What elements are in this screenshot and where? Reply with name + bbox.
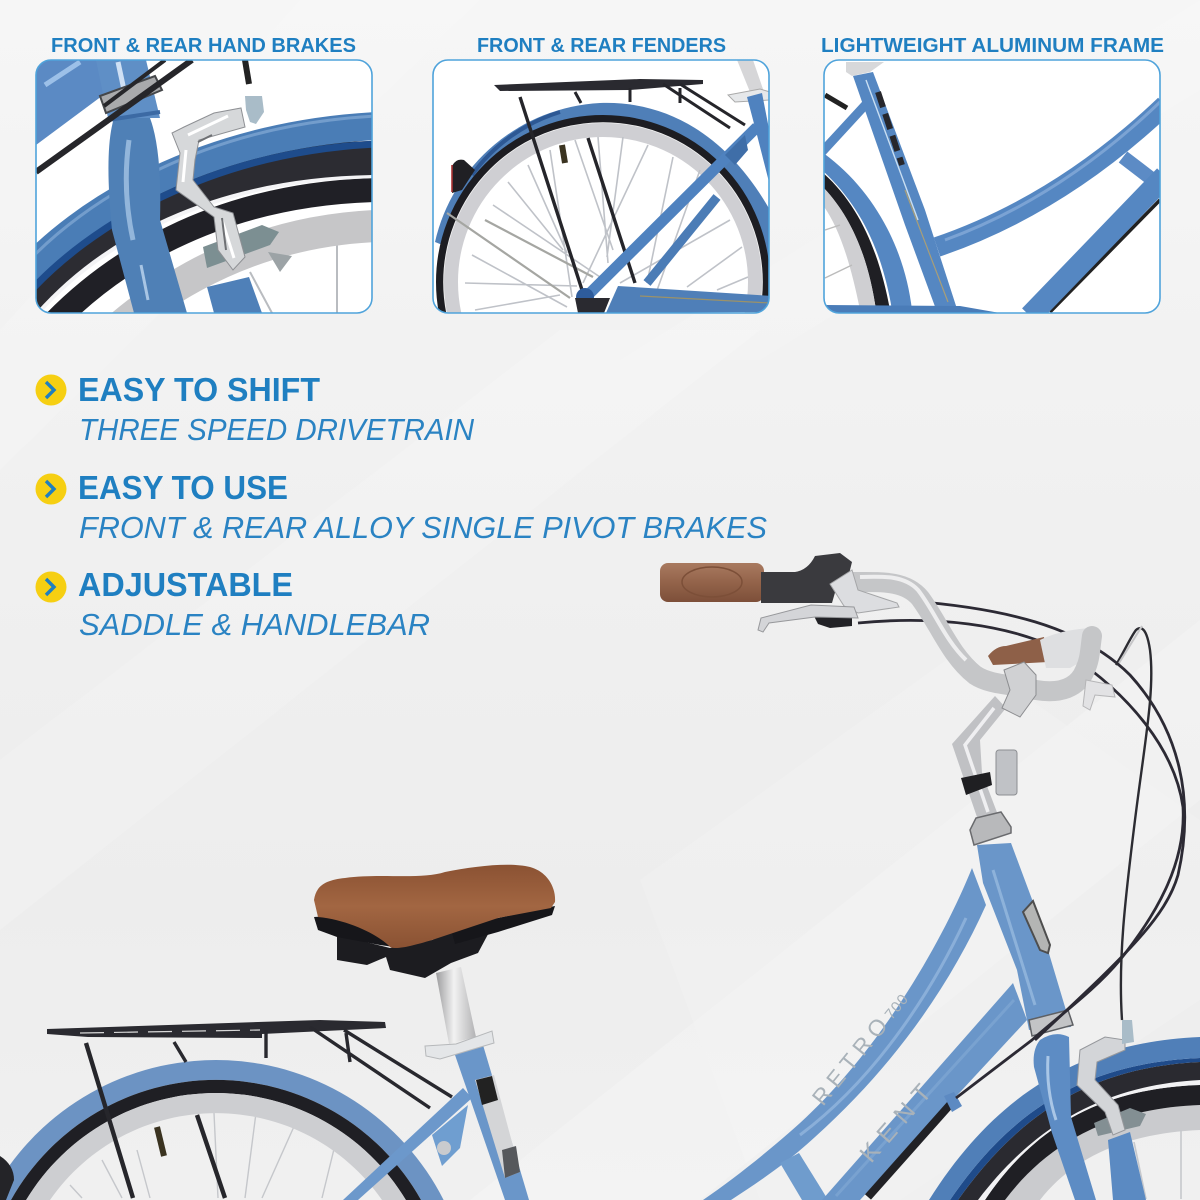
feature: easy to use: EASY TO USE xyxy=(78,469,288,506)
feature: easy to shift xyxy=(36,371,475,447)
valve xyxy=(562,145,565,163)
fender xyxy=(435,102,768,259)
cross connector xyxy=(780,1153,828,1200)
spokes xyxy=(250,240,337,313)
tyre inner xyxy=(985,1085,1200,1200)
tread xyxy=(958,1062,1200,1200)
chain stay bar xyxy=(826,305,1000,313)
spokes xyxy=(1134,1130,1181,1199)
headset ring xyxy=(100,76,162,113)
rear light edge xyxy=(0,1156,14,1200)
panel: hand brake photo xyxy=(35,59,373,314)
white stripe xyxy=(978,1080,1200,1200)
brake pad xyxy=(203,225,279,268)
saddle black shell xyxy=(314,906,555,947)
seat tube xyxy=(455,1045,529,1200)
lever body black xyxy=(814,616,852,628)
fork xyxy=(1034,1034,1096,1200)
fender xyxy=(20,116,376,296)
fork lower blade xyxy=(1108,1132,1146,1200)
caption: front and rear hand brakes: FRONT & REAR HAND BRAKES xyxy=(51,35,356,57)
feature: easy to shift: THREE SPEED DRIVETRAIN xyxy=(79,412,475,447)
curved top tube xyxy=(703,868,986,1200)
valve xyxy=(157,1127,164,1156)
cable clip xyxy=(944,1092,962,1112)
near grip xyxy=(660,563,764,602)
rear wheel xyxy=(0,1043,444,1200)
stem xyxy=(952,696,1006,820)
tyre and rim xyxy=(436,115,768,312)
saddle xyxy=(314,865,555,948)
lower tube xyxy=(822,983,1027,1200)
cable barrel xyxy=(245,96,264,124)
front brake pad xyxy=(1094,1108,1146,1136)
feature: easy to use xyxy=(36,469,767,545)
seat post xyxy=(436,967,476,1044)
feature list xyxy=(36,371,767,642)
frame lettering: RETRO 700: RETRO xyxy=(807,1008,896,1110)
icon: yellow chevron bullet xyxy=(36,572,66,602)
rack struts xyxy=(520,97,635,293)
caption: front and rear fenders: FRONT & REAR FENDERS xyxy=(477,35,726,57)
fork xyxy=(108,112,187,313)
cross connector xyxy=(1123,157,1153,180)
fender xyxy=(929,1037,1200,1200)
frame lettering: RETRO 700: 700 xyxy=(882,991,913,1023)
spokes xyxy=(70,1113,335,1198)
lower tube xyxy=(1030,176,1165,316)
seat stay xyxy=(343,1088,472,1200)
panel: fenders photo xyxy=(432,59,770,314)
head tube xyxy=(977,843,1071,1030)
stem clamp xyxy=(1002,662,1036,717)
feature: adjustable: SADDLE & HANDLEBAR xyxy=(79,607,430,642)
dropout bracket xyxy=(432,1105,468,1166)
fender xyxy=(0,1060,444,1200)
icon: yellow chevron bullet xyxy=(36,374,66,406)
panel: frame photo xyxy=(822,60,1165,316)
handlebar xyxy=(851,577,1092,691)
spokes xyxy=(465,137,748,310)
far bar end xyxy=(1040,628,1099,668)
rim xyxy=(26,1093,406,1200)
front brake caliper xyxy=(1077,1037,1125,1135)
feature: easy to shift: EASY TO SHIFT xyxy=(78,371,320,408)
rear wheel section xyxy=(822,152,912,310)
feature: adjustable: ADJUSTABLE xyxy=(78,566,293,603)
rim xyxy=(1005,1105,1200,1200)
front fender and wheel xyxy=(929,1037,1200,1200)
brake cables xyxy=(858,601,1185,1098)
curved top tube xyxy=(937,102,1165,247)
frame tubes xyxy=(575,93,775,313)
brake lever xyxy=(758,605,858,632)
shifter xyxy=(761,553,852,603)
lever clamp xyxy=(830,570,899,613)
seat stay xyxy=(822,102,868,152)
icon: yellow chevron bullet xyxy=(36,474,66,504)
sticker xyxy=(475,1075,520,1178)
head badge xyxy=(1023,901,1050,953)
seat clamp xyxy=(425,1031,494,1059)
reflector bracket xyxy=(961,772,992,795)
saddle undercarriage xyxy=(337,923,494,978)
rim and tyre xyxy=(36,141,372,312)
rack struts xyxy=(86,1043,225,1198)
reflector xyxy=(996,750,1017,795)
brake cables xyxy=(36,60,249,172)
seat post and clamp xyxy=(728,60,770,102)
reflector xyxy=(452,160,475,193)
fender inner band xyxy=(950,1058,1200,1200)
upper left frame tube xyxy=(36,60,103,144)
headset xyxy=(970,812,1011,845)
feature: adjustable xyxy=(36,566,430,642)
lower fork blade xyxy=(207,277,262,313)
far brake lever xyxy=(1083,680,1115,710)
caption: lightweight aluminum frame: LIGHTWEIGHT ALUMINUM FRAME xyxy=(821,35,1164,57)
cable xyxy=(1050,200,1160,312)
frame lettering: KENT: KENT xyxy=(854,1072,943,1168)
black stay xyxy=(825,95,847,108)
front cable barrel xyxy=(1122,1020,1134,1044)
tyre xyxy=(11,1080,421,1200)
bicycle illustration xyxy=(0,553,1200,1200)
rear rack xyxy=(47,1020,452,1108)
far grip xyxy=(988,637,1048,665)
clamp xyxy=(846,62,884,76)
seat tube xyxy=(853,72,958,312)
brake caliper xyxy=(172,108,245,270)
headset ring xyxy=(1029,1010,1073,1036)
rack xyxy=(494,79,745,128)
fender stay xyxy=(447,213,593,298)
head tube xyxy=(96,60,160,118)
feature: easy to use: FRONT & REAR ALLOY SINGLE PIVOT BRAKES xyxy=(79,510,767,545)
lower cable under tube xyxy=(868,1098,956,1197)
